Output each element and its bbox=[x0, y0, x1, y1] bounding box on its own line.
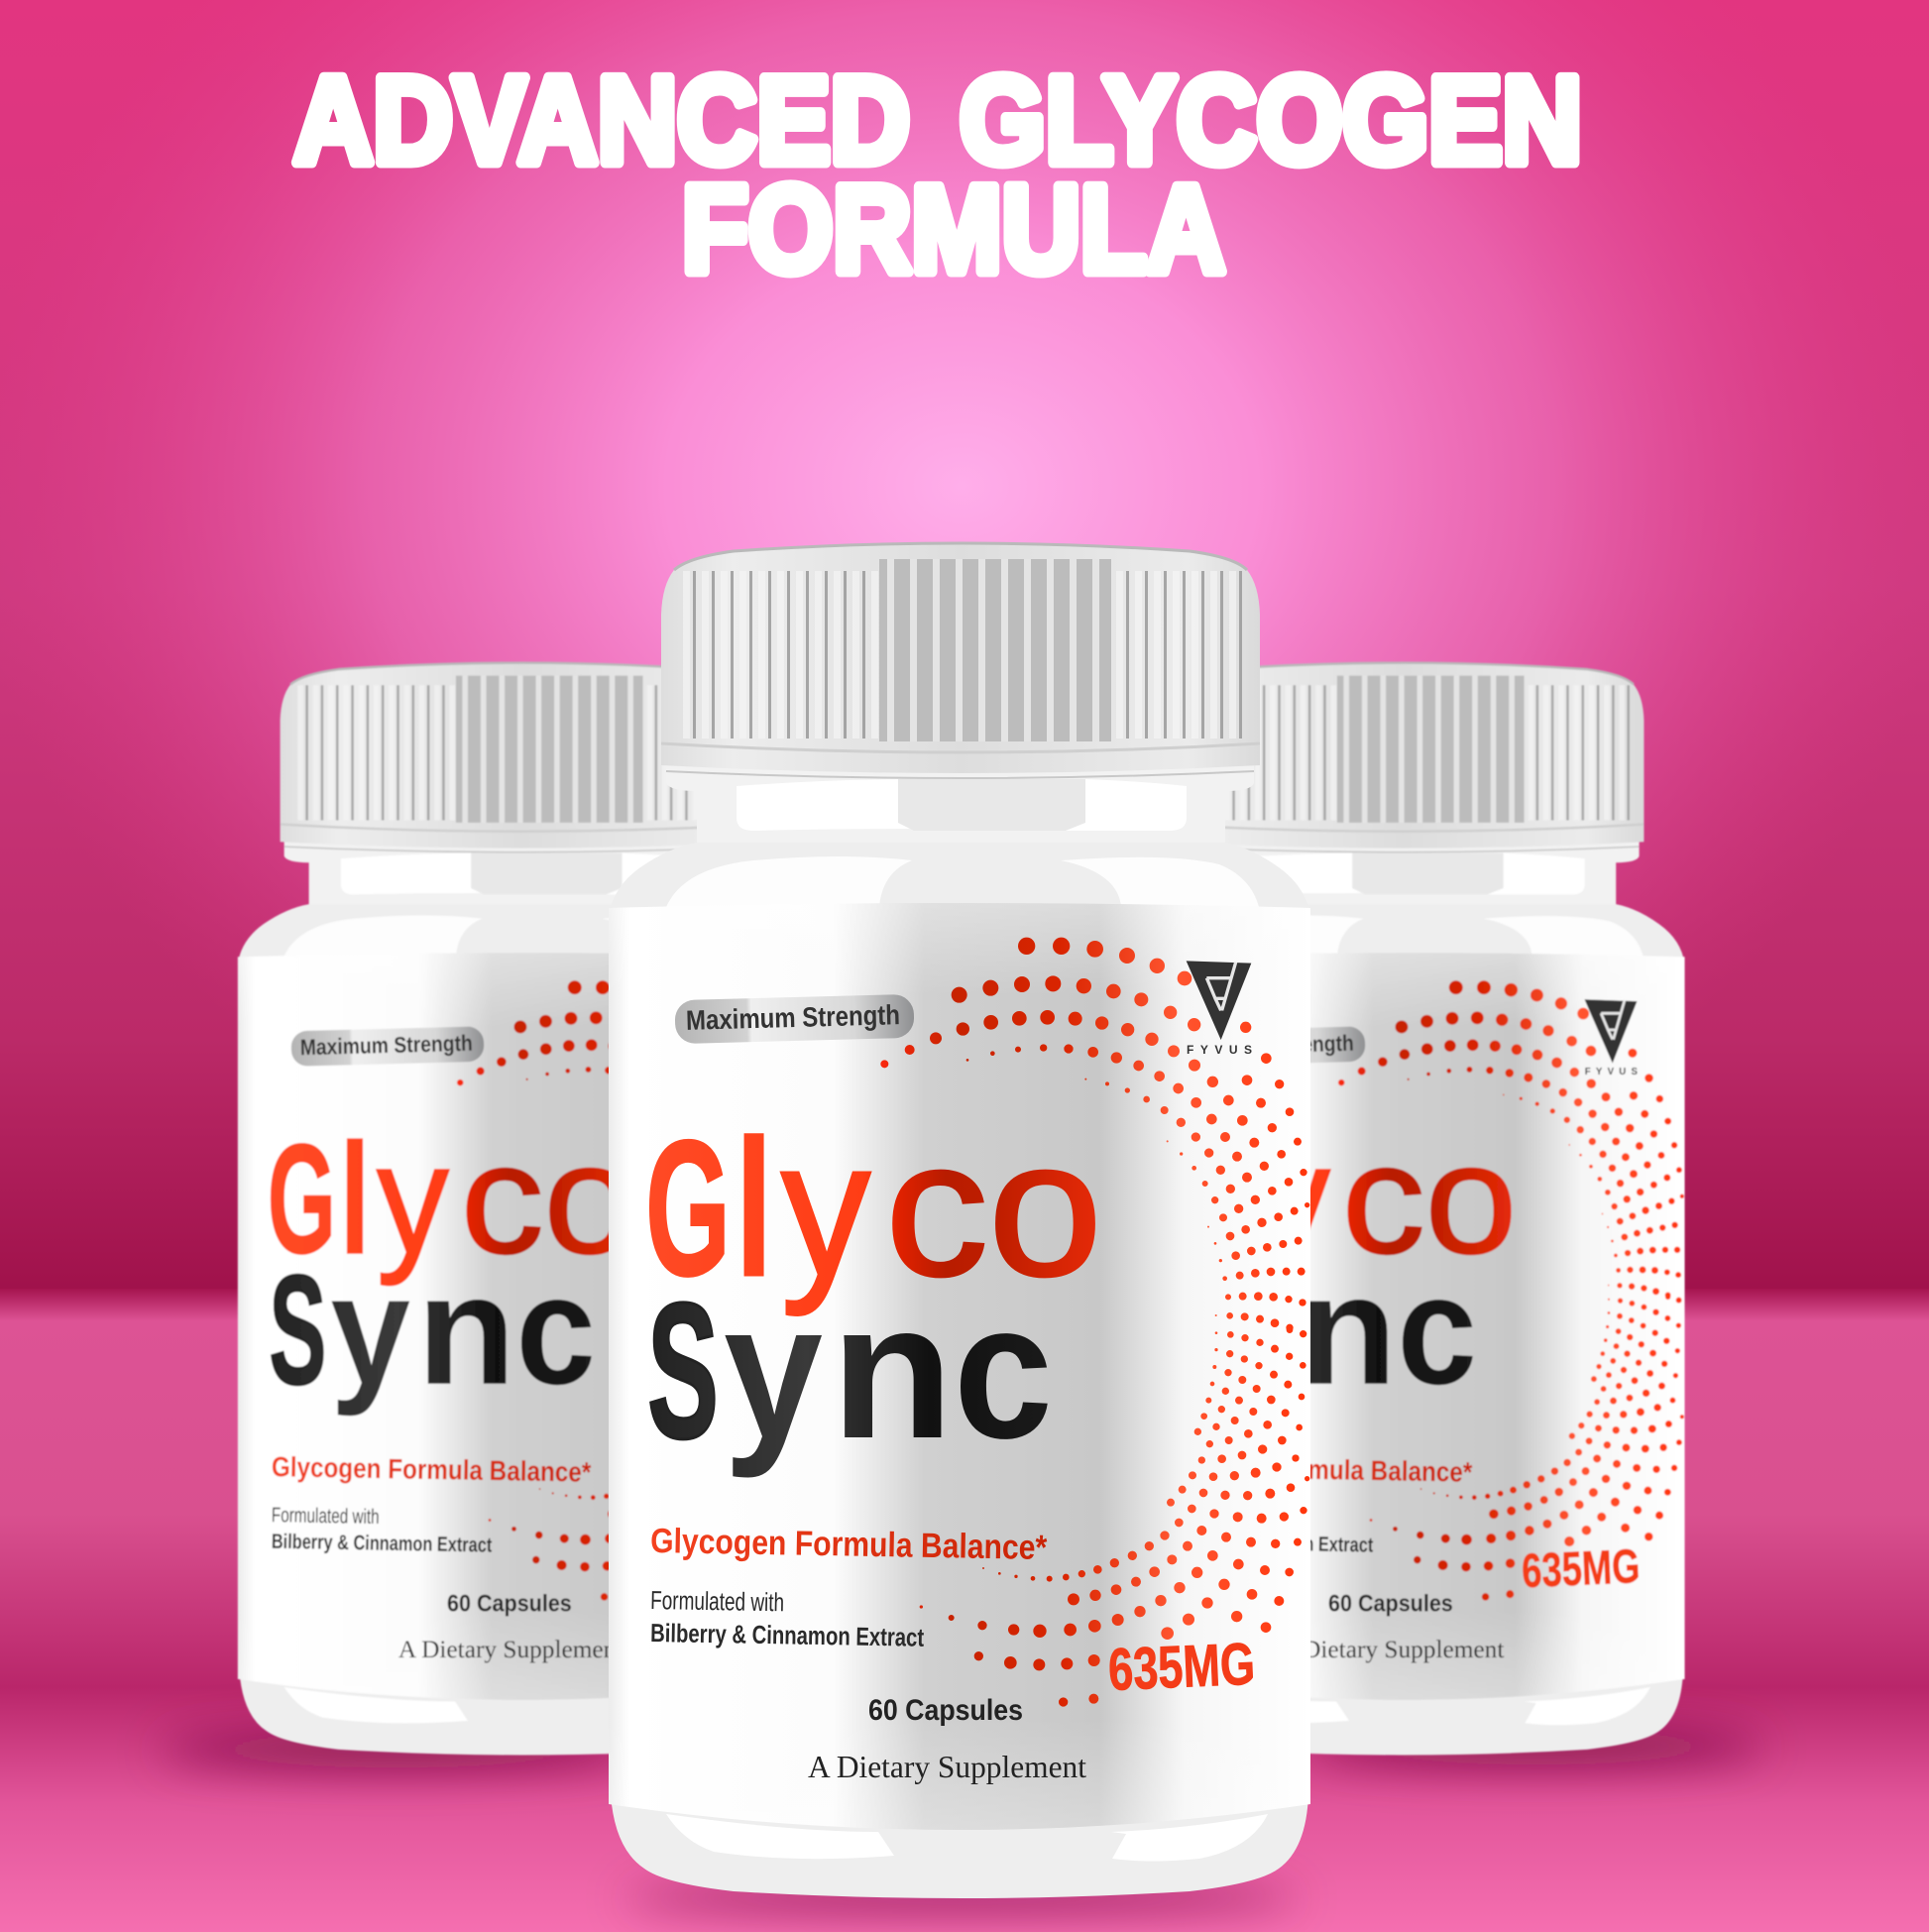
product name Sync: y bbox=[330, 1244, 410, 1418]
dosage: 635MG bbox=[1521, 1539, 1642, 1598]
dosage: 635MG bbox=[639, 1539, 760, 1598]
title line 2: FORMULA bbox=[682, 162, 1225, 298]
product name Sync: y bbox=[1211, 1244, 1292, 1418]
product name Glyco: G bbox=[1149, 1113, 1217, 1287]
product name Sync: n bbox=[831, 1263, 954, 1479]
product name Glyco: G bbox=[645, 1100, 731, 1316]
pill text: Maximum Strength bbox=[686, 999, 900, 1036]
supplement line: A Dietary Supplement bbox=[1280, 1635, 1505, 1663]
product name Sync: c bbox=[1397, 1244, 1477, 1418]
product name Sync: c bbox=[515, 1244, 596, 1418]
extract line: Bilberry & Cinnamon Extract bbox=[650, 1618, 925, 1652]
product name Sync: S bbox=[1150, 1244, 1207, 1418]
product name Glyco: c bbox=[885, 1100, 988, 1316]
product name Glyco: o bbox=[988, 1100, 1102, 1316]
centre label text bbox=[645, 999, 1256, 1784]
product name Glyco: c bbox=[1342, 1113, 1425, 1287]
product name Glyco: y bbox=[1258, 1113, 1330, 1287]
supplement line: A Dietary Supplement bbox=[398, 1635, 624, 1663]
right label text bbox=[1149, 1031, 1642, 1663]
title bbox=[293, 53, 1582, 298]
extract line: Bilberry & Cinnamon Extract bbox=[1153, 1531, 1373, 1557]
capsules count: 60 Capsules bbox=[868, 1694, 1023, 1727]
title line 1: GLYCOGEN bbox=[960, 53, 1582, 189]
product name Glyco: y bbox=[781, 1100, 870, 1316]
product name Sync: y bbox=[724, 1263, 823, 1479]
product name Sync: n bbox=[416, 1244, 515, 1418]
tagline: Glycogen Formula Balance* bbox=[272, 1450, 592, 1488]
capsules count: 60 Capsules bbox=[1328, 1590, 1453, 1617]
background floor bbox=[0, 1289, 1929, 1932]
tagline: Glycogen Formula Balance* bbox=[650, 1522, 1048, 1567]
product name Sync: n bbox=[1298, 1244, 1397, 1418]
logo word: FYVUS bbox=[1187, 1043, 1252, 1057]
dosage: 635MG bbox=[1107, 1631, 1256, 1703]
product name Glyco: l bbox=[733, 1100, 775, 1316]
product name Glyco: c bbox=[461, 1113, 544, 1287]
product name Glyco: y bbox=[377, 1113, 449, 1287]
product name Glyco: l bbox=[338, 1113, 372, 1287]
centre bottle bbox=[609, 543, 1310, 1898]
logo word: FYVUS bbox=[1585, 1067, 1639, 1078]
product name Glyco: o bbox=[544, 1113, 635, 1287]
logo word: FYVUS bbox=[704, 1067, 757, 1078]
formulated line: Formulated with bbox=[272, 1504, 380, 1529]
product name Sync: S bbox=[647, 1263, 719, 1479]
left bottle bbox=[238, 663, 804, 1755]
extract line: Bilberry & Cinnamon Extract bbox=[272, 1531, 492, 1557]
formulated line: Formulated with bbox=[650, 1585, 784, 1617]
formulated line: Formulated with bbox=[1153, 1504, 1261, 1529]
title line 1: ADVANCED bbox=[293, 53, 910, 189]
product name Sync: S bbox=[269, 1244, 326, 1418]
supplement line: A Dietary Supplement bbox=[808, 1749, 1086, 1784]
pill text: Maximum Strength bbox=[1181, 1031, 1354, 1060]
background wall bbox=[0, 0, 1929, 1299]
background glow bbox=[0, 0, 1929, 1299]
product name Glyco: o bbox=[1425, 1113, 1517, 1287]
left label text bbox=[268, 1031, 760, 1663]
product name Glyco: l bbox=[1219, 1113, 1253, 1287]
tagline: Glycogen Formula Balance* bbox=[1153, 1450, 1473, 1488]
product name Sync: c bbox=[954, 1263, 1053, 1479]
product name Glyco: G bbox=[268, 1113, 336, 1287]
right bottle bbox=[1119, 663, 1685, 1755]
pill text: Maximum Strength bbox=[299, 1031, 473, 1060]
capsules count: 60 Capsules bbox=[447, 1590, 572, 1617]
floor shadows bbox=[159, 1727, 1764, 1912]
